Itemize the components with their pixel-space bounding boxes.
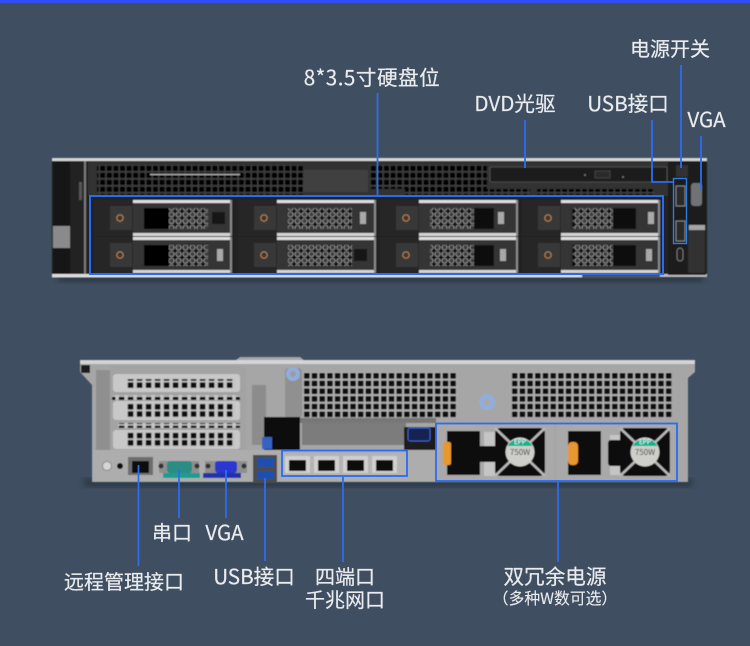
hard drive bays xyxy=(94,200,662,273)
label: hard drive bays: 8*3.5寸硬盘位 xyxy=(304,61,440,91)
label: front VGA: VGA xyxy=(687,103,726,133)
front server chassis xyxy=(52,158,707,282)
highlight: front USB xyxy=(674,178,686,244)
power supply 2 xyxy=(557,423,676,481)
label: serial port: 串口 xyxy=(152,517,192,546)
label: rear USB: USB接口 xyxy=(213,560,295,590)
front left ear xyxy=(53,161,86,274)
network ports xyxy=(283,453,407,477)
rear IO strip xyxy=(93,450,438,483)
VGA port xyxy=(203,461,247,478)
top accent bar xyxy=(0,0,750,3)
label: rear VGA: VGA xyxy=(205,516,244,546)
leader lines xyxy=(138,65,701,566)
front vents xyxy=(88,162,668,196)
highlight: power supplies xyxy=(436,424,677,481)
highlight: network ports xyxy=(282,450,407,476)
rear centre bracket xyxy=(262,367,495,479)
label: redundant power xyxy=(493,560,617,609)
USB ports xyxy=(253,455,277,483)
front control panel xyxy=(668,162,706,275)
management port xyxy=(128,457,153,475)
serial port xyxy=(158,461,200,478)
power supply 1 xyxy=(436,423,554,481)
label: remote management: 远程管理接口 xyxy=(64,566,184,595)
label: four-port gigabit network xyxy=(305,561,385,613)
label: redundant power: （多种W数可选） xyxy=(493,586,617,609)
rear ventilation grids xyxy=(303,372,672,418)
label: DVD drive: DVD光驱 xyxy=(474,87,556,117)
label: four-port gigabit network: 四端口 xyxy=(315,561,375,590)
rear PCI slots xyxy=(96,366,266,450)
label: power switch: 电源开关 xyxy=(630,33,710,62)
DVD drive xyxy=(490,167,667,182)
label: front USB: USB接口 xyxy=(587,87,669,117)
label: redundant power: 双冗余电源 xyxy=(504,560,606,590)
rear server chassis xyxy=(80,357,695,487)
highlight: hard drive bays xyxy=(90,196,663,274)
label: four-port gigabit network: 千兆网口 xyxy=(305,584,385,613)
